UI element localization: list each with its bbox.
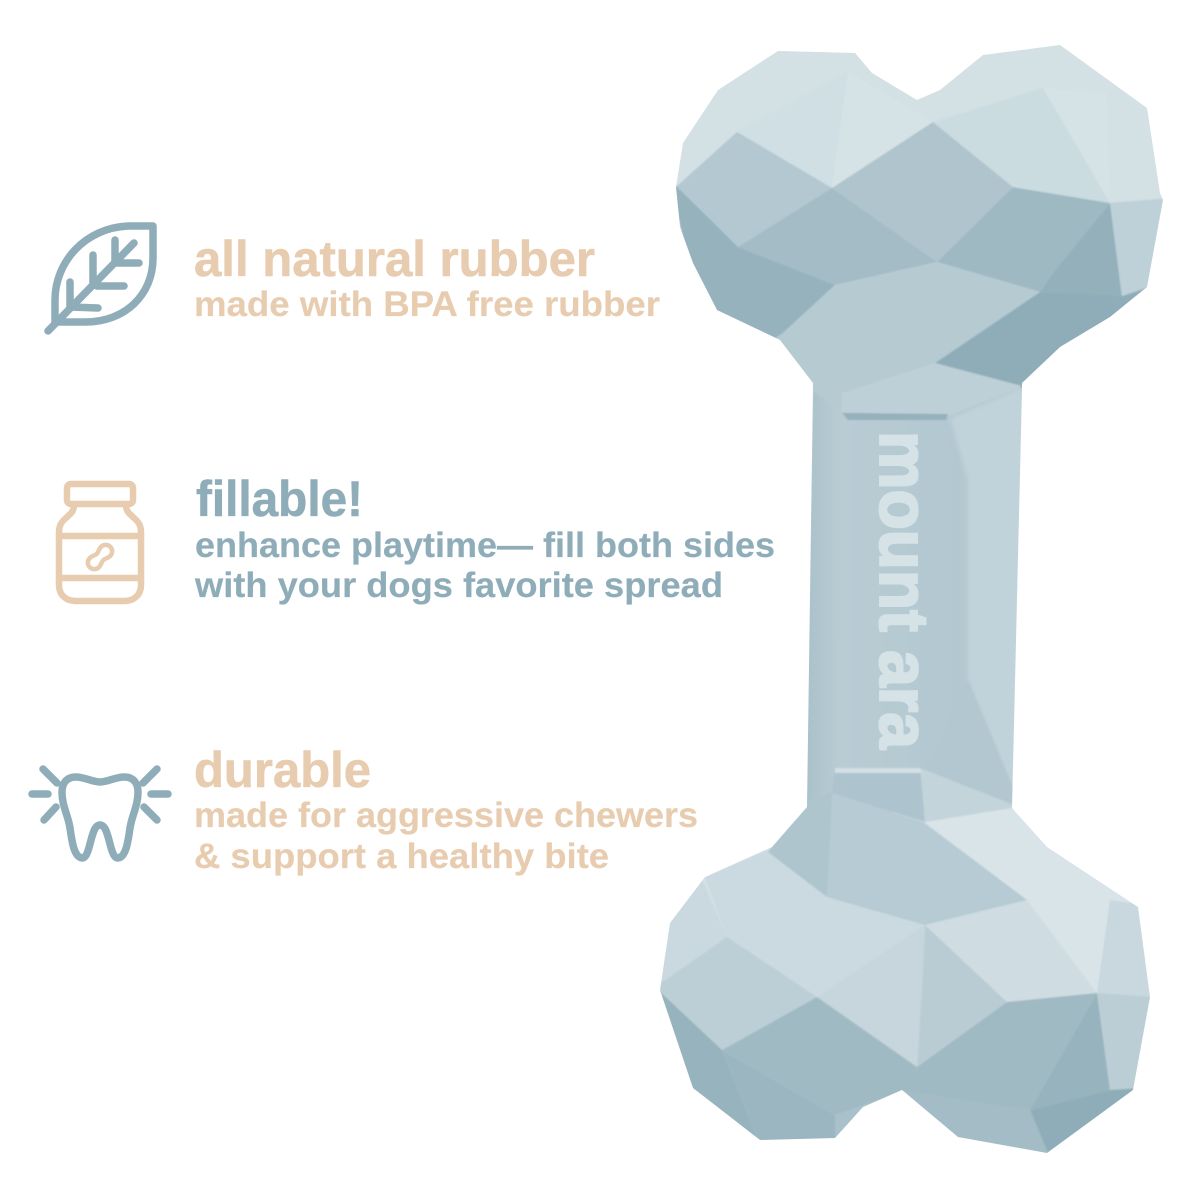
bottom knob facets bbox=[655, 768, 1155, 1158]
text: made with BPA free rubber: made with BPA free rubber bbox=[194, 285, 660, 324]
text: with your dogs favorite spread: with your dogs favorite spread bbox=[194, 566, 723, 605]
bone chew toy bbox=[650, 40, 1180, 1160]
text: made for aggressive chewers: made for aggressive chewers bbox=[194, 796, 698, 835]
top knob facets bbox=[676, 122, 1163, 415]
text: support a healthy bite: & support a healthy bite bbox=[194, 837, 609, 876]
heading: all natural rubber: all natural rubber bbox=[194, 231, 595, 287]
shaft bbox=[805, 380, 1034, 812]
heading: fillable!: fillable! bbox=[196, 471, 363, 527]
feature: durable bbox=[32, 742, 698, 876]
text: enhance playtime: enhance playtime— fill both sides bbox=[195, 526, 775, 565]
icon: tooth with rays bbox=[32, 769, 168, 858]
feature: fillable bbox=[59, 471, 775, 605]
icon: leaf bbox=[48, 226, 153, 331]
icon: peanut butter jar bbox=[59, 484, 141, 601]
embossed brand name: mount ara bbox=[865, 431, 943, 750]
toy silhouette bbox=[676, 45, 1162, 1094]
shaft notches bbox=[835, 413, 948, 773]
toy facets and shading bbox=[650, 40, 1180, 1160]
feature: all natural rubber bbox=[48, 226, 660, 331]
heading: durable: durable bbox=[194, 742, 371, 798]
